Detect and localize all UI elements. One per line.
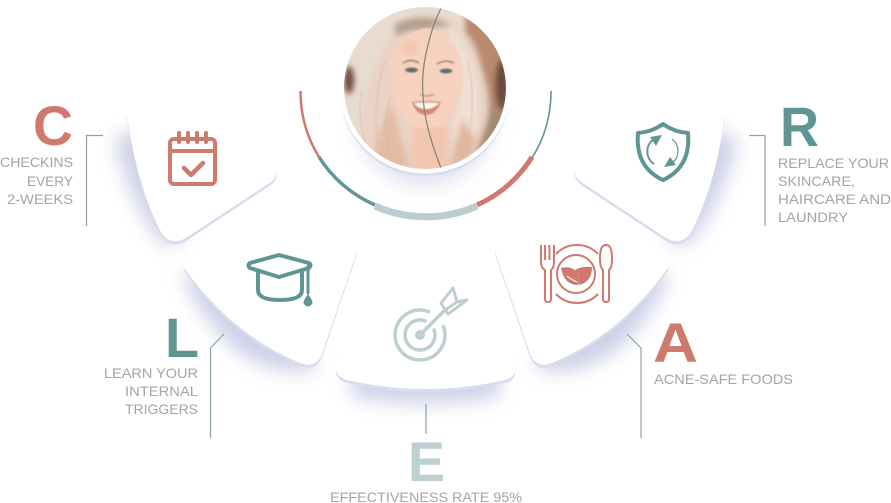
text: checkins every 2-weeks: 2-WEEKS [7,191,73,207]
icon: target with arrow [395,288,467,360]
text: replace your skincare, haircare and laundry [778,155,891,225]
letter E: E [408,430,445,493]
panel: C card [127,100,277,244]
text: checkins every 2-weeks: EVERY [27,173,74,189]
label A [653,311,793,387]
text: learn your internal triggers: INTERNAL [125,383,198,399]
letter A: A [653,311,698,374]
text: learn your internal triggers: TRIGGERS [125,401,198,417]
text: learn your internal triggers: LEARN YOUR [104,365,198,381]
icon: calendar with check [170,133,215,184]
panel: A card [495,194,668,368]
icon: shield with refresh arrows [638,124,688,180]
text: acne-safe foods: ACNE-SAFE FOODS [654,371,793,387]
panel: R card [575,100,725,244]
progress arc [300,91,551,217]
text: replace your skincare, haircare and laundry: HAIRCARE AND [778,191,891,207]
card shadows [114,125,738,404]
icon: graduation cap [248,255,312,306]
panel: E card [336,252,515,392]
photo shadow [359,52,491,184]
text: replace your skincare, haircare and laundry: REPLACE YOUR [778,155,889,171]
text: replace your skincare, haircare and laundry: SKINCARE, [778,173,855,189]
letter L: L [165,306,199,369]
panel: L card [184,194,357,368]
leader lines [86,136,765,438]
label L [104,306,199,417]
letter R: R [780,95,819,158]
label E [330,430,522,503]
letter C: C [33,94,73,157]
text: checkins every 2-weeks [0,154,74,207]
text: replace your skincare, haircare and laundry: LAUNDRY [778,209,849,225]
label C [0,94,74,207]
text: checkins every 2-weeks: CHECKINS [0,154,73,170]
text: learn your internal triggers [104,365,198,417]
portrait photo [341,7,509,176]
icon: plate with leaves, fork and spoon [541,245,612,303]
label R [778,95,891,225]
